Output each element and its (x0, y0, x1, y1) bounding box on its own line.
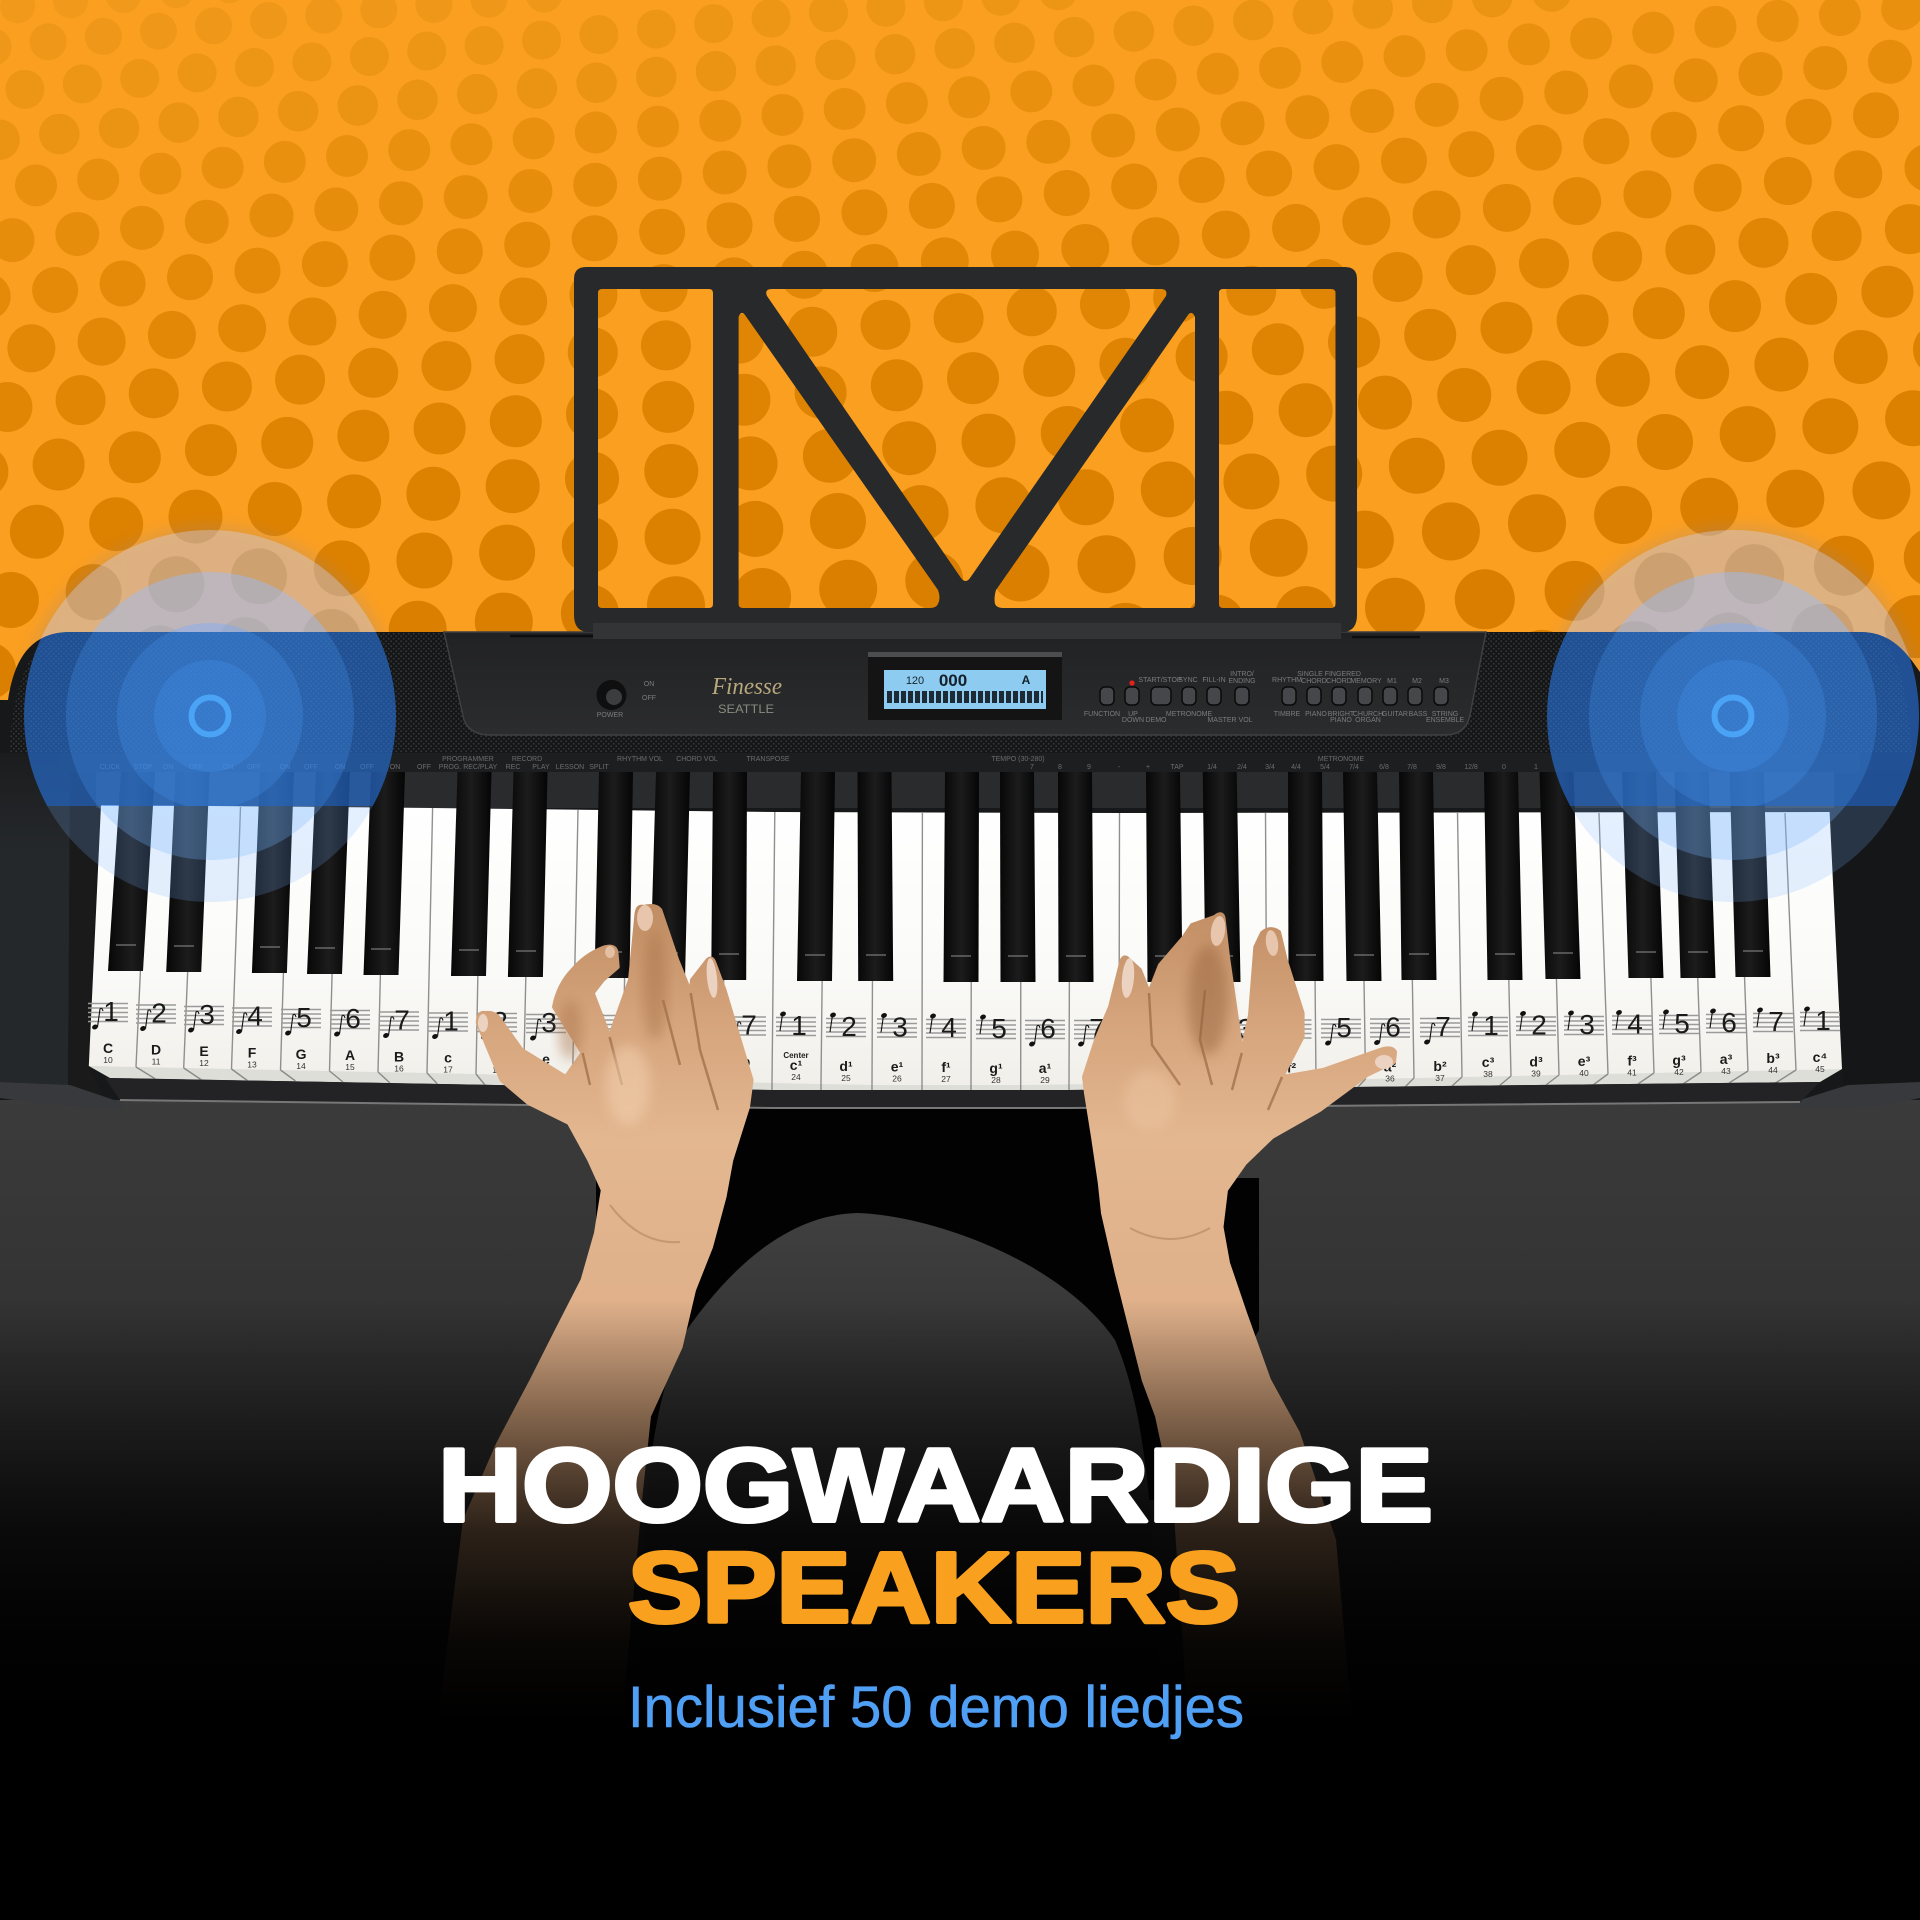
power switch: OFF (642, 695, 656, 702)
music stand (574, 267, 1357, 639)
function label strip above the keys: LESSON (556, 764, 584, 771)
left side panel (0, 753, 96, 1085)
key sticker 3 E: 3 (199, 999, 215, 1030)
key sticker 5 g1: g¹ (989, 1060, 1003, 1076)
key sticker 5 g (626, 1009, 666, 1078)
function label strip above the keys: METRONOME (1318, 756, 1364, 763)
key sticker 2 d2: 2 (1188, 1013, 1204, 1044)
panel labels: UP (1128, 711, 1138, 718)
key sticker 7 b2: 7 (1435, 1011, 1451, 1042)
power switch: POWER (597, 712, 623, 719)
key sticker 5 g3: 5 (1674, 1008, 1690, 1039)
LCD display: A (1022, 673, 1031, 687)
key sticker 6 a1: 29 (1040, 1075, 1050, 1085)
key sticker 2 d1 (826, 1011, 866, 1083)
function label strip above the keys: 1/4 (1207, 764, 1217, 771)
function label strip above the keys: TAP (1170, 764, 1184, 771)
key sticker 1 c1 center (776, 1010, 816, 1082)
LCD display: 120 (906, 675, 924, 687)
key sticker 2 d2: d² (1186, 1060, 1200, 1076)
key sticker 4 F: F (248, 1044, 257, 1060)
key backs in shadow (96, 772, 1834, 808)
panel labels: TIMBRE (1274, 711, 1301, 718)
key sticker 2 d3 (1516, 1010, 1556, 1078)
function label strip above the keys: STOP (134, 764, 153, 771)
key sticker 3 e: e (542, 1051, 550, 1067)
panel buttons (1100, 687, 1448, 705)
key sticker 5 g3 (1659, 1008, 1699, 1077)
key sticker 5 g1: 28 (991, 1075, 1001, 1085)
LCD display: 000 (939, 671, 967, 690)
right hand shading (1149, 990, 1282, 1110)
key sticker 7 b: 23 (741, 1068, 751, 1078)
key sticker 2 d1: 25 (841, 1073, 851, 1083)
key sticker 6 a2: 6 (1385, 1012, 1401, 1042)
function label strip above the keys: 9 (1087, 764, 1091, 771)
key sticker 4 f3: 4 (1627, 1008, 1643, 1040)
key sticker 6 A: 15 (345, 1062, 355, 1072)
keyboard front edge (105, 1078, 1820, 1108)
panel labels: RHYTHM (1272, 677, 1302, 684)
key sticker 7 B: 7 (394, 1004, 410, 1036)
key sticker 7 b (726, 1010, 766, 1078)
subtitle: Inclusief 50 demo liedjes (628, 1675, 1244, 1740)
panel labels: INTRO/ (1230, 671, 1254, 678)
function label strip above the keys: RECORD (512, 756, 542, 763)
function label strip above the keys: 7/4 (1349, 764, 1359, 771)
function label strip above the keys: 6/8 (1379, 764, 1389, 771)
floor behind the keyboard (0, 1095, 1920, 1920)
key sticker 1 c2 (1124, 1013, 1164, 1085)
right hand nails (1120, 958, 1136, 998)
key sticker 7 B (379, 1004, 419, 1074)
key sticker 2 D (136, 998, 176, 1066)
key sticker 2 d3: 2 (1531, 1010, 1547, 1040)
key sticker 2 d3: 39 (1531, 1068, 1541, 1078)
front key lips (89, 1066, 1842, 1090)
key sticker 1 c4: 1 (1815, 1005, 1831, 1036)
function label strip above the keys: PROG. REC/PLAY (439, 764, 498, 771)
key sticker 7 B: B (394, 1048, 404, 1064)
key sticker 6 a3: a³ (1720, 1051, 1733, 1067)
key sticker 3 e3: 3 (1579, 1009, 1595, 1040)
key sticker 5 G (281, 1002, 321, 1071)
key sticker 5 g3: 42 (1674, 1067, 1684, 1077)
key sticker 5 G: 14 (296, 1061, 306, 1071)
key sticker 7 b1: 30 (1089, 1075, 1099, 1085)
key sticker 6 a3 (1706, 1007, 1746, 1076)
key sticker 2 d2 (1173, 1013, 1213, 1085)
function label strip above the keys (60, 753, 1860, 773)
key sticker 3 e1: 26 (892, 1074, 902, 1084)
key sticker 7 b3 (1753, 1006, 1793, 1075)
panel labels: M2 (1412, 678, 1422, 685)
panel labels: CHURCH (1353, 711, 1383, 718)
black keys (108, 772, 155, 971)
function label strip above the keys: REC (506, 764, 520, 771)
key sticker 3 e3: 40 (1579, 1068, 1589, 1078)
title block (438, 1428, 1433, 1740)
key sticker 6 a: 6 (691, 1010, 707, 1040)
key sticker 5 g2: 5 (1336, 1012, 1352, 1043)
function label strip above the keys: - (1118, 764, 1121, 771)
panel labels: M3 (1439, 678, 1449, 685)
left key cheek (68, 770, 105, 1100)
panel labels: SYNC (1178, 677, 1198, 684)
key sticker 2 d1: d¹ (839, 1058, 853, 1074)
key sticker 3 e2: 33 (1238, 1075, 1247, 1085)
key sticker 6 a: a (692, 1054, 700, 1070)
key lip separators (136, 1067, 1796, 1090)
black key bevel highlights (116, 945, 1763, 956)
key sticker 3 e2: e² (1236, 1060, 1249, 1076)
key sticker 5 G: G (296, 1046, 307, 1062)
Finesse Seattle logo: Finesse (711, 674, 782, 700)
function label strip above the keys: PLAY (532, 764, 550, 771)
function label strip above the keys: CLICK (100, 764, 121, 771)
key sticker 3 E: 12 (199, 1058, 209, 1068)
key sticker 1 c (428, 1006, 468, 1074)
function label strip above the keys: TEMPO (30-280) (991, 756, 1045, 763)
key sticker 1 c1 center: 24 (791, 1072, 801, 1082)
key sticker 2 d: d (493, 1050, 501, 1066)
function label strip above the keys: 7/8 (1407, 764, 1417, 771)
key sticker 4 F: 13 (247, 1060, 257, 1070)
key sticker 2 d (477, 1006, 517, 1075)
icon: right speaker sound waves (1541, 524, 1920, 908)
key sticker 1 c1 center: c¹ (790, 1057, 803, 1073)
function label strip above the keys: ON (280, 764, 290, 771)
key sticker 5 G: 5 (296, 1002, 312, 1033)
red indicator LED (1129, 680, 1135, 686)
key sticker 2 d2: 32 (1188, 1075, 1198, 1085)
key sticker 5 g1 (976, 1013, 1016, 1085)
key sticker 7 b1 (1074, 1013, 1114, 1085)
white key gaps (136, 806, 1796, 1085)
function label strip above the keys: 4/4 (1291, 764, 1301, 771)
function label strip above the keys: ON (335, 764, 345, 771)
key sticker 3 e (526, 1007, 566, 1076)
key sticker 6 a1 (1025, 1013, 1065, 1085)
left hand shading (583, 993, 718, 1110)
key sticker 5 g2 (1321, 1012, 1361, 1084)
key sticker 1 c1 center: Center (783, 1051, 809, 1060)
function label strip above the keys: 0 (1502, 764, 1506, 771)
key sticker 6 a2: a² (1384, 1058, 1397, 1074)
key sticker 4 f1: f¹ (941, 1059, 951, 1075)
function label strip above the keys: 3/4 (1265, 764, 1275, 771)
function label strip above the keys: ON (163, 764, 173, 771)
key sticker 1 c3: 38 (1483, 1069, 1493, 1079)
key sticker 6 a (676, 1010, 716, 1078)
function label strip above the keys: OFF (304, 764, 318, 771)
key sticker 7 b1: b¹ (1087, 1060, 1101, 1076)
key sticker 1 c4: c⁴ (1813, 1049, 1827, 1065)
function label strip above the keys: 7 (1030, 764, 1034, 771)
panel labels: FUNCTION (1084, 711, 1120, 718)
key sticker 4 f: 20 (591, 1067, 601, 1077)
function label strip above the keys: OFF (417, 764, 431, 771)
key stickers (88, 996, 1840, 1085)
key sticker 1 C: 1 (103, 996, 119, 1027)
bench and dark gap under the keyboard (596, 1100, 1259, 1500)
key sticker 5 g2: g² (1334, 1059, 1348, 1075)
keys (89, 772, 1842, 1090)
key sticker 4 f1: 4 (941, 1012, 957, 1043)
function label strip above the keys: OFF (189, 764, 203, 771)
function label strip above the keys: OFF (360, 764, 374, 771)
key sticker 7 b: 7 (741, 1010, 757, 1040)
panel labels: STRING (1432, 711, 1458, 718)
key sticker 7 b2: b² (1433, 1058, 1447, 1074)
key sticker 1 C (88, 996, 128, 1065)
panel labels: MASTER VOL (1207, 717, 1253, 724)
orange dotted background (0, 0, 1920, 760)
key sticker 1 c2: c² (1137, 1060, 1150, 1076)
panel labels: DOWN (1122, 717, 1144, 724)
key sticker 5 g1: 5 (991, 1013, 1007, 1044)
right hand and arm (1084, 914, 1395, 1720)
key sticker 3 e3 (1564, 1009, 1604, 1078)
key sticker 4 f (576, 1008, 616, 1077)
key sticker 7 b3: 44 (1768, 1065, 1778, 1075)
key sticker 3 E (184, 999, 224, 1068)
left hand and arm (440, 905, 752, 1720)
key sticker 3 e2 (1222, 1013, 1262, 1085)
power switch (596, 680, 656, 719)
seated person seen from above (640, 1213, 1160, 1720)
function label strip above the keys: 1 (1534, 764, 1538, 771)
key sticker 6 a3: 6 (1721, 1007, 1737, 1038)
key sticker 4 f2: f² (1287, 1060, 1296, 1076)
key sticker 1 C: 10 (103, 1055, 113, 1065)
key sticker 3 e1: 3 (892, 1012, 908, 1042)
key sticker 6 A (330, 1003, 370, 1072)
power switch: ON (644, 681, 654, 688)
key sticker 5 g: g (642, 1053, 650, 1069)
key sticker 7 b1: 7 (1089, 1013, 1105, 1044)
function label strip above the keys: 2/4 (1237, 764, 1247, 771)
key sticker 4 f3 (1612, 1008, 1652, 1078)
key sticker 5 g2: 35 (1336, 1074, 1346, 1084)
panel labels: PIANO (1330, 717, 1352, 724)
icon: left speaker sound waves (18, 524, 402, 908)
key sticker 1 c2: 31 (1139, 1075, 1148, 1085)
key sticker 2 D: 2 (151, 998, 167, 1028)
keyboard body (0, 632, 1920, 1110)
key sticker 6 a1: a¹ (1039, 1060, 1052, 1076)
key sticker 2 d3: d³ (1529, 1054, 1543, 1070)
LCD display (868, 652, 1062, 720)
key sticker 1 c: 1 (443, 1006, 459, 1036)
key sticker 6 a2 (1370, 1012, 1410, 1084)
key sticker 6 a2: 36 (1385, 1074, 1395, 1084)
key sticker 4 f: 4 (591, 1008, 607, 1039)
key sticker 4 f2: 4 (1287, 1012, 1302, 1044)
panel labels: M1 (1387, 678, 1397, 685)
function label strip above the keys: 9/8 (1436, 764, 1446, 771)
key sticker 6 a: 22 (691, 1068, 701, 1078)
key sticker 4 f3: 41 (1627, 1068, 1637, 1078)
bottom dark gradient overlay (0, 1300, 1920, 1920)
key sticker 1 c: 17 (443, 1064, 453, 1074)
control panel (444, 632, 1486, 735)
Finesse Seattle logo (711, 674, 782, 716)
panel labels: GUITAR (1382, 711, 1408, 718)
panel labels: BRIGHT (1328, 711, 1355, 718)
right foot corner (1790, 1082, 1920, 1108)
function label strip above the keys: 8 (1058, 764, 1062, 771)
key sticker 3 e2: 3 (1238, 1013, 1253, 1044)
panel labels: ORGAN (1355, 717, 1381, 724)
key sticker 3 e: 19 (541, 1066, 551, 1076)
key sticker 5 g3: g³ (1672, 1052, 1686, 1068)
key sticker 2 d: 18 (492, 1065, 502, 1075)
key sticker 1 c4: 45 (1815, 1064, 1825, 1074)
key sticker 3 e: 3 (541, 1007, 557, 1038)
left hand nails (637, 905, 653, 931)
key sticker 2 D: D (151, 1042, 161, 1058)
key sticker 5 g: 5 (641, 1009, 657, 1040)
white key surface (89, 805, 1842, 1085)
function label strip above the keys: SPLIT (589, 764, 609, 771)
function label strip above the keys: 5/4 (1320, 764, 1330, 771)
function label strip above the keys: ON (390, 764, 400, 771)
key sticker 6 a1: 6 (1040, 1013, 1056, 1044)
heading: HOOGWAARDIGE: HOOGWAARDIGE (438, 1428, 1433, 1544)
key sticker 7 b3: b³ (1766, 1050, 1780, 1066)
panel labels: MEMORY (1350, 678, 1382, 685)
key sticker 4 F: 4 (247, 1000, 263, 1032)
key sticker 3 e1: e¹ (891, 1058, 904, 1074)
key sticker 4 f1: 27 (941, 1074, 951, 1084)
key sticker 6 A: 6 (345, 1003, 361, 1034)
function label strip above the keys: 12/8 (1464, 764, 1478, 771)
key sticker 1 c1 center: 1 (791, 1010, 807, 1041)
key sticker 2 D: 11 (152, 1056, 161, 1066)
key sticker 1 c3: 1 (1483, 1010, 1499, 1041)
function label strip above the keys: PROGRAMMER (442, 756, 494, 763)
panel labels: BASS (1409, 711, 1428, 718)
key sticker 1 c4 (1800, 1005, 1840, 1074)
foot corners (0, 1082, 125, 1110)
panel labels: ENSEMBLE (1426, 717, 1464, 724)
key sticker 7 B: 16 (394, 1064, 404, 1074)
heading: SPEAKERS: SPEAKERS (628, 1532, 1240, 1644)
key sticker 1 c3: c³ (1482, 1054, 1495, 1070)
panel labels: PIANO (1305, 711, 1327, 718)
key sticker 7 b3: 7 (1768, 1006, 1784, 1037)
key sticker 7 b2 (1420, 1011, 1460, 1083)
function label strip above the keys: ON (223, 764, 233, 771)
key sticker 7 b: b (742, 1054, 750, 1070)
panel labels (1084, 671, 1464, 724)
key sticker 6 A: A (345, 1047, 355, 1063)
panel labels: CHORD (1301, 678, 1327, 685)
function label strip above the keys: CHORD VOL (676, 756, 718, 763)
key sticker 2 d1: 2 (841, 1011, 857, 1042)
key sticker 3 E: E (199, 1043, 209, 1059)
key sticker 4 f2 (1272, 1012, 1312, 1084)
key sticker 1 c: c (444, 1050, 452, 1066)
panel labels: ENDING (1228, 678, 1256, 685)
panel labels: FILL-IN (1202, 677, 1226, 684)
key sticker 1 c3 (1468, 1010, 1508, 1079)
speaker grille (9, 632, 1912, 753)
function label strip above the keys: + (1146, 764, 1150, 771)
function label strip above the keys: RHYTHM VOL (617, 756, 663, 763)
key sticker 1 C: C (103, 1040, 113, 1056)
Finesse Seattle logo: SEATTLE (718, 702, 774, 716)
panel labels: CHORD (1326, 678, 1352, 685)
panel labels: SINGLE FINGERED (1297, 671, 1361, 678)
panel labels: METRONOME (1166, 711, 1212, 718)
key sticker 7 b2: 37 (1435, 1073, 1445, 1083)
key sticker 5 g: 21 (641, 1068, 651, 1078)
function label strip above the keys: TRANSPOSE (746, 756, 790, 763)
key sticker 3 e3: e³ (1578, 1053, 1591, 1069)
key sticker 1 c2: 1 (1139, 1013, 1154, 1044)
right side panel (1830, 770, 1920, 1095)
key sticker 4 F (232, 1000, 272, 1070)
panel labels: START/STOP (1138, 677, 1182, 684)
function label strip above the keys: OFF (247, 764, 261, 771)
key sticker 4 f1 (926, 1012, 966, 1084)
panel labels: DEMO (1146, 717, 1167, 724)
key sticker 6 a3: 43 (1721, 1066, 1731, 1076)
key sticker 3 e1 (877, 1012, 917, 1084)
key sticker 2 d: 2 (492, 1006, 508, 1037)
key sticker 4 f3: f³ (1627, 1052, 1637, 1068)
key sticker 4 f2: 34 (1287, 1074, 1296, 1084)
key sticker 4 f: f (594, 1052, 599, 1068)
